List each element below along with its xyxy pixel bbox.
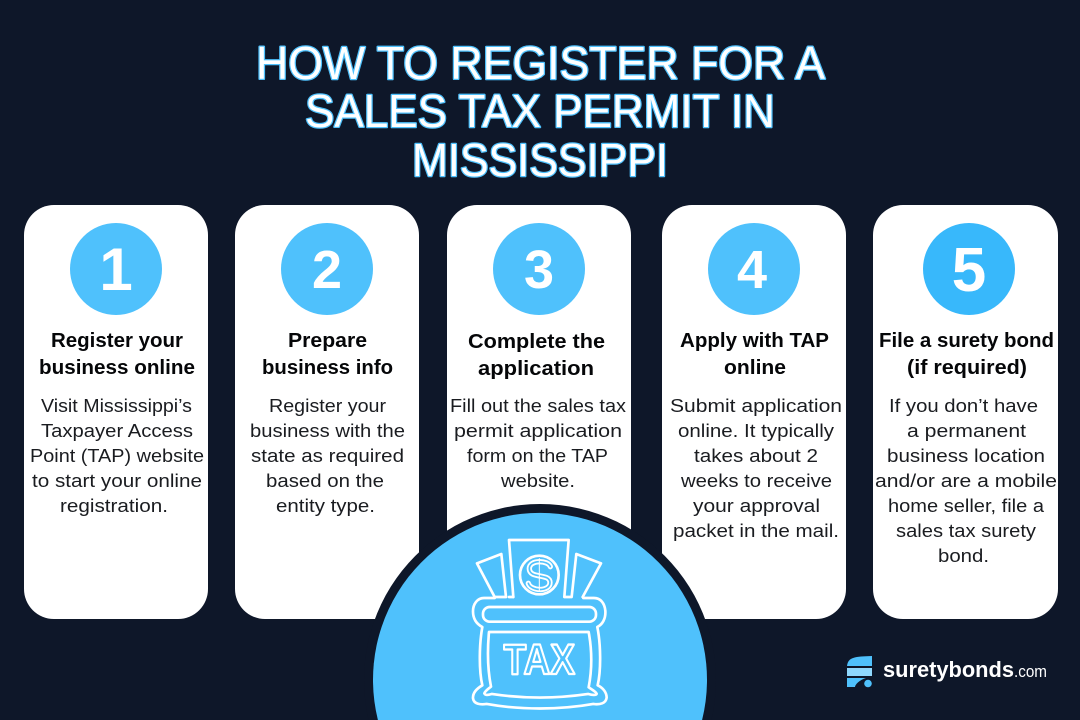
step 2 number badge: [281, 223, 373, 315]
step 4 number badge: [708, 223, 800, 315]
title: MISSISSIPPI: [412, 134, 668, 186]
step 4 description: weeks to receive: [680, 470, 832, 491]
step 5 number badge: 5: [952, 236, 986, 305]
step 5 description: a permanent: [907, 420, 1026, 441]
step 2 heading: [262, 330, 393, 379]
step 2 description: Register your: [269, 395, 386, 416]
logo: suretybonds.com: .com: [1014, 662, 1047, 681]
icon: logo mark: [847, 656, 872, 687]
step 4 description: Submit application: [670, 395, 842, 416]
panel: step 3: [447, 205, 631, 619]
step 1 description: Visit Mississippi’s: [41, 395, 192, 416]
step 3 heading: Complete the: [468, 331, 605, 353]
icon: bag outline: [473, 598, 607, 708]
step 1 number badge: [70, 223, 162, 315]
medallion: tax circle: [364, 504, 716, 720]
logo: suretybonds.com: suretybonds: [883, 657, 1014, 682]
step 5 heading: File a surety bond: [879, 330, 1054, 352]
step 5 number badge: [923, 223, 1015, 315]
step 3 description: permit application: [454, 420, 622, 441]
step 1 heading: Register your: [51, 330, 183, 352]
icon: banknotes: [477, 540, 601, 597]
panel: step 4: [662, 205, 846, 619]
step 2 description: state as required: [251, 445, 404, 466]
step 5 description: sales tax surety: [896, 520, 1037, 541]
step 5 description: and/or are a mobile: [875, 470, 1057, 491]
step 5 description: bond.: [938, 545, 989, 566]
step 5 description: business location: [887, 445, 1045, 466]
step 3 number badge: [493, 223, 585, 315]
panel: step 1: [24, 205, 208, 619]
panel: step 5: [873, 205, 1058, 619]
step 3 heading: application: [478, 358, 594, 380]
step 2 description: business with the: [250, 420, 405, 441]
step 5 description: [875, 395, 1057, 566]
title: SALES TAX PERMIT IN: [305, 85, 775, 137]
title: [256, 37, 825, 186]
step 3 description: Fill out the sales tax: [450, 395, 627, 416]
step 1 description: to start your online: [32, 470, 202, 491]
step 5 heading: [879, 330, 1054, 379]
step 4 description: takes about 2: [694, 445, 818, 466]
title: HOW TO REGISTER FOR A: [256, 37, 825, 89]
step 2 heading: business info: [262, 357, 393, 379]
step 1 heading: business online: [39, 357, 195, 379]
step 4 description: online. It typically: [678, 420, 835, 441]
step 2 heading: Prepare: [288, 330, 367, 352]
step 2 description: based on the: [266, 470, 384, 491]
step 1 description: registration.: [60, 495, 168, 516]
step 2 number badge: 2: [312, 240, 342, 300]
step 5 description: home seller, file a: [888, 495, 1045, 516]
step 3 heading: [468, 331, 605, 380]
step 1 heading: [39, 330, 195, 379]
step 3 number badge: 3: [524, 240, 554, 300]
step 1 number badge: 1: [99, 236, 133, 303]
icon: TAX label: TAX: [504, 636, 575, 684]
step 3 description: [450, 395, 627, 491]
step 2 description: entity type.: [276, 495, 375, 516]
step 4 description: [670, 395, 842, 541]
step 1 description: Point (TAP) website: [30, 445, 204, 466]
step 4 heading: [680, 330, 829, 379]
step 4 description: your approval: [693, 495, 820, 516]
panel: step 2: [235, 205, 419, 619]
icon: money bag with tax label: [473, 540, 607, 708]
step 2 description: [250, 395, 405, 516]
step 4 heading: online: [724, 357, 786, 379]
step 4 description: packet in the mail.: [673, 520, 839, 541]
step 4 number badge: 4: [737, 240, 767, 300]
step 5 description: If you don’t have: [889, 395, 1038, 416]
step 5 heading: (if required): [907, 357, 1027, 379]
step 3 description: website.: [500, 470, 575, 491]
logo: suretybonds.com: [847, 656, 1047, 687]
step 3 description: form on the TAP: [467, 445, 608, 466]
step 1 description: [30, 395, 204, 516]
step 1 description: Taxpayer Access: [41, 420, 193, 441]
step 4 heading: Apply with TAP: [680, 330, 829, 352]
